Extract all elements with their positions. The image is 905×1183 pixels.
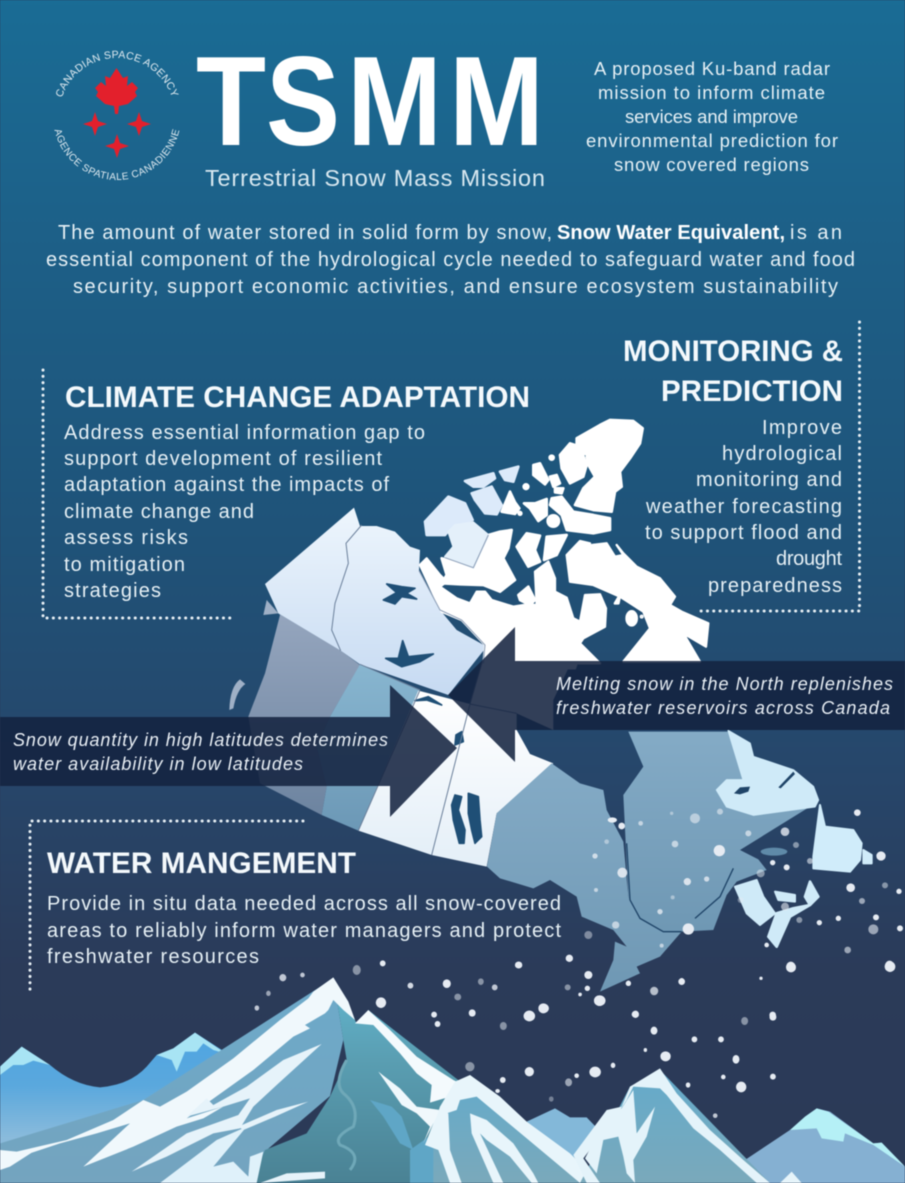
second peak streaks xyxy=(425,1110,538,1183)
far right mountain xyxy=(745,1108,905,1183)
heading line 2: PREDICTION xyxy=(661,375,843,408)
icon: bottom star xyxy=(105,134,129,158)
small snow patch xyxy=(780,1172,802,1183)
Baffin Island xyxy=(567,541,708,662)
mountains: main peak and left range xyxy=(0,977,467,1183)
body text: monitoring and xyxy=(696,469,842,491)
mountains: right peaks xyxy=(425,1068,770,1183)
arrow: snow quantity flows xyxy=(0,685,457,817)
Yukon and Northwest Territories xyxy=(265,508,487,695)
Ontario-Quebec border xyxy=(627,843,733,932)
arrow caption: Melting snow in the North replenishes xyxy=(556,674,893,694)
icon: right star xyxy=(127,112,151,136)
New Brunswick xyxy=(735,880,775,925)
main peak right blue facet xyxy=(370,1100,467,1183)
mission description: services and improve xyxy=(625,106,798,127)
mission description: A proposed Ku-band radar xyxy=(594,58,830,79)
territorial borders xyxy=(419,535,488,663)
body text: Provide in situ data needed across all snow-covered xyxy=(47,893,561,915)
intro paragraph: The amount of water stored in solid form by snow, xyxy=(58,222,552,244)
map: Arctic and Nunavut xyxy=(419,420,708,668)
Labrador xyxy=(717,731,818,815)
Anticosti Island xyxy=(761,848,787,856)
arrow bar and head xyxy=(0,685,457,817)
grey ridge xyxy=(152,1090,190,1108)
map of Canada: west and prairies xyxy=(229,508,582,867)
intro paragraph: security, support economic activities, and ensure ecosystem sustainability xyxy=(73,276,838,298)
icon: left star xyxy=(83,112,107,136)
body text: to mitigation xyxy=(64,554,185,576)
main right ridge snow xyxy=(355,1010,467,1103)
heading: CLIMATE CHANGE ADAPTATION xyxy=(65,381,530,414)
body text: drought xyxy=(776,548,842,570)
third peak snow face xyxy=(585,1090,655,1183)
body text xyxy=(47,893,561,968)
map water features xyxy=(383,584,482,843)
logo top text: CANADIAN SPACE AGENCY xyxy=(55,50,180,98)
arrow bar and head xyxy=(448,627,905,762)
body text xyxy=(64,422,425,602)
body text: hydrological xyxy=(722,443,842,465)
British Columbia xyxy=(248,599,360,815)
title xyxy=(196,30,544,172)
Banks, Melville and Prince Patrick islands xyxy=(425,467,518,535)
panel: water management xyxy=(30,821,561,990)
Saskatchewan xyxy=(358,691,470,855)
Newfoundland xyxy=(813,805,872,872)
mission description xyxy=(586,58,838,175)
Quebec xyxy=(623,732,810,932)
intro paragraph: essential component of the hydrological cycle needed to safeguard water and food xyxy=(46,249,855,271)
back hill xyxy=(527,1108,595,1160)
body text: assess risks xyxy=(64,527,188,549)
arrow: melting snow flows south: freshwater reservoirs across Canada xyxy=(556,698,890,718)
body text: to support flood and xyxy=(645,522,842,544)
right streak xyxy=(378,1072,450,1143)
snowflakes above mountains xyxy=(255,960,894,1118)
body text: support development of resilient xyxy=(64,448,382,470)
second peak body xyxy=(433,1075,597,1183)
arrow: melting snow flows south xyxy=(448,627,905,762)
title: S xyxy=(266,30,340,172)
mountains: right background xyxy=(527,1108,905,1183)
mission description: snow covered regions xyxy=(614,154,809,175)
intro paragraph: is an xyxy=(790,222,842,244)
body text: preparedness xyxy=(708,575,842,597)
provincial borders xyxy=(332,525,517,855)
second peak snow xyxy=(437,1075,600,1183)
snow streak xyxy=(132,1044,322,1172)
Arctic islands xyxy=(442,420,643,625)
third peak body xyxy=(580,1070,770,1183)
body text: weather forecasting xyxy=(645,496,842,518)
Nunavut under arrow xyxy=(470,630,582,730)
third peak outline snow xyxy=(573,1068,770,1183)
James Bay island xyxy=(608,817,617,823)
Victoria Island west xyxy=(445,522,488,568)
bottom snow patch xyxy=(260,1172,325,1183)
panel: climate change adaptation xyxy=(43,370,530,618)
map: eastern Canada xyxy=(487,731,903,1021)
Alaska panhandle and Haida Gwaii xyxy=(229,600,278,710)
Alberta xyxy=(317,664,420,831)
back left snow caps xyxy=(0,1033,227,1075)
main peak body xyxy=(250,978,467,1183)
body text xyxy=(645,417,842,597)
title: T xyxy=(196,30,266,172)
heading: WATER MANGEMENT xyxy=(47,847,356,880)
far right snow cap xyxy=(790,1108,905,1167)
intro paragraph xyxy=(46,222,855,298)
logo: Canadian Space Agency xyxy=(54,50,180,181)
snowflakes over eastern Canada xyxy=(516,809,903,1021)
mission description: environmental prediction for xyxy=(586,130,838,151)
snow streak lower xyxy=(238,1102,308,1130)
arrow: snow quantity flows: water availability in low latitudes xyxy=(13,754,303,774)
heading: MONITORING & xyxy=(623,335,843,368)
Ontario xyxy=(487,763,682,992)
body text: adaptation against the impacts of xyxy=(64,474,389,496)
Nunavut mainland xyxy=(420,558,606,668)
body text: strategies xyxy=(64,580,161,602)
back left mountains xyxy=(0,1033,233,1183)
title: M xyxy=(449,30,544,172)
logo bottom text: AGENCE SPATIALE CANADIENNE xyxy=(54,128,180,181)
Manitoba xyxy=(432,704,553,867)
river wiggle xyxy=(338,1060,355,1170)
title: M xyxy=(347,30,442,172)
body text: areas to reliably inform water managers and protect xyxy=(47,920,561,942)
body text: climate change and xyxy=(64,501,254,523)
Prince Edward Island xyxy=(775,892,795,902)
mission description: mission to inform climate xyxy=(598,82,825,103)
body text: Improve xyxy=(762,417,842,439)
Nova Scotia xyxy=(768,882,818,947)
arrow caption: Snow quantity in high latitudes determines xyxy=(13,730,388,750)
main ridge snow xyxy=(0,977,355,1170)
body text: freshwater resources xyxy=(47,946,259,968)
panel: monitoring and prediction xyxy=(623,322,860,611)
subtitle: Terrestrial Snow Mass Mission xyxy=(205,165,545,191)
body text: Address essential information gap to xyxy=(64,422,425,444)
lower snow field xyxy=(160,1127,263,1183)
intro paragraph: Snow Water Equivalent, xyxy=(557,222,785,244)
icon: maple leaf xyxy=(95,68,138,114)
left flank xyxy=(0,978,343,1183)
Labrador lake xyxy=(734,772,795,794)
